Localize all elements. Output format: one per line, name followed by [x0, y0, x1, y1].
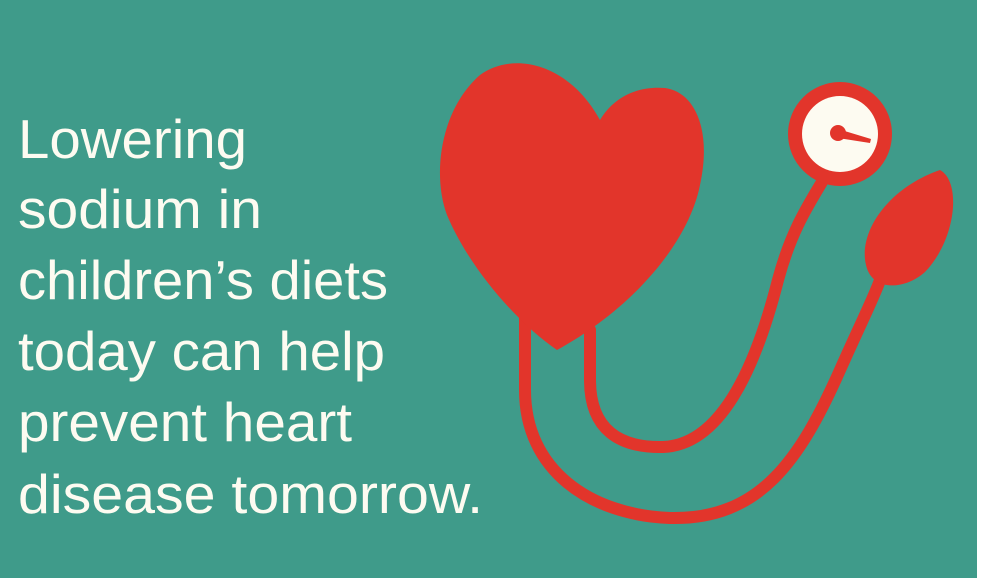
text block: headline	[18, 108, 483, 525]
text block: headline: disease tomorrow.	[18, 463, 483, 525]
text block: headline: Lowering	[18, 108, 247, 170]
text block: headline: today can help	[18, 320, 385, 382]
bulb	[865, 170, 953, 285]
tubes	[525, 182, 880, 518]
heart	[440, 63, 704, 350]
text block: headline: sodium in	[18, 178, 262, 240]
text block: headline: children’s diets	[18, 249, 388, 311]
text block: headline: prevent heart	[18, 391, 352, 453]
icon: stethoscope heart with gauge	[440, 63, 953, 518]
gauge	[788, 82, 892, 186]
